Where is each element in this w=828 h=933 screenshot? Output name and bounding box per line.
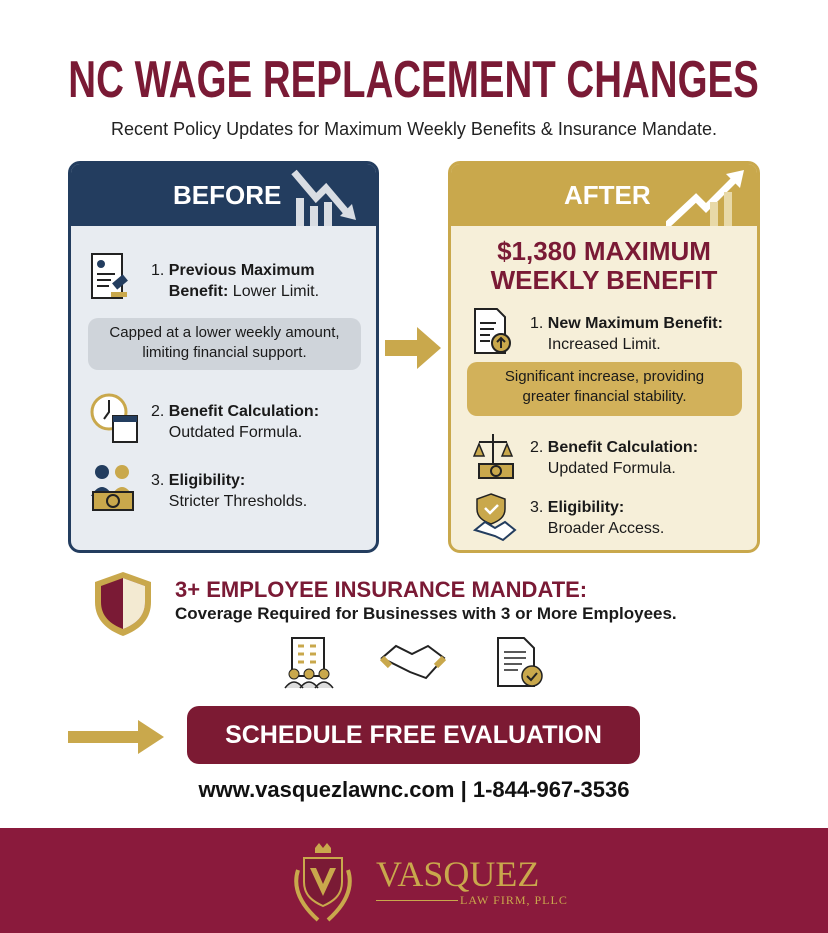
before header [71, 164, 376, 226]
item 2: Updated Formula. [548, 460, 676, 477]
item 3 [473, 493, 664, 542]
subtitle: Recent Policy Updates for Maximum Weekly Benefits & Insurance Mandate. [111, 119, 717, 139]
headline: $1,380 [490, 236, 718, 295]
panel: before [68, 161, 379, 553]
item 1 [474, 308, 723, 354]
logo: VASQUEZ [376, 854, 539, 894]
item 3: Broader Access. [548, 520, 664, 537]
callout: capped: Capped at a lower weekly amount, [109, 324, 340, 341]
headline: $1,380: WEEKLY BENEFIT [491, 265, 717, 295]
item 3: 3. Eligibility: [530, 499, 624, 516]
panel: after [448, 161, 760, 553]
icon: handshake [380, 644, 446, 680]
item 1: 1. Previous Maximum [151, 262, 315, 279]
item 3: 3. Eligibility: [151, 472, 245, 489]
arrow: before to after [385, 327, 441, 369]
callout: significant increase: Significant increase, providing [505, 368, 704, 385]
before header: BEFORE [173, 180, 281, 210]
icon: up chart [666, 170, 744, 226]
button: schedule: SCHEDULE FREE EVALUATION [225, 721, 602, 749]
contact line: www.vasquezlawnc.com | 1-844-967-3536 [199, 777, 629, 802]
after header [451, 164, 757, 226]
icon: down chart [291, 170, 356, 226]
logo: LAW FIRM, PLLC [460, 893, 568, 907]
icons row [284, 637, 543, 688]
icon: document check [497, 637, 543, 687]
item 1: Benefit: Lower Limit. [169, 283, 319, 300]
arrow: to button [68, 720, 164, 754]
mandate heading [175, 577, 677, 623]
button: schedule [187, 706, 640, 764]
item 1: 1. New Maximum Benefit: [530, 315, 723, 332]
item 2 [473, 434, 698, 479]
item 2: 2. Benefit Calculation: [151, 403, 319, 420]
callout: significant increase [467, 362, 742, 416]
item 3 [91, 465, 307, 511]
icon: crest [294, 843, 352, 922]
item 3: Stricter Thresholds. [169, 493, 307, 510]
item 2 [90, 394, 319, 443]
headline: $1,380: $1,380 MAXIMUM [497, 236, 711, 266]
item 1: Increased Limit. [548, 336, 661, 353]
item 2: Outdated Formula. [169, 424, 302, 441]
item 1 [91, 253, 319, 300]
mandate heading: Coverage Required for Businesses with 3 or More Employees. [175, 604, 677, 623]
icon: building [284, 637, 334, 688]
title: NC WAGE REPLACEMENT CHANGES [69, 51, 759, 109]
footer [0, 828, 828, 933]
callout: capped: limiting financial support. [142, 344, 307, 361]
item 2: 2. Benefit Calculation: [530, 439, 698, 456]
callout: significant increase: greater financial stability. [523, 388, 686, 405]
after header: AFTER [564, 180, 651, 210]
icon: shield [95, 572, 151, 636]
logo [294, 843, 568, 922]
callout: capped [88, 318, 361, 370]
mandate heading: 3+ EMPLOYEE INSURANCE MANDATE: [175, 577, 587, 602]
